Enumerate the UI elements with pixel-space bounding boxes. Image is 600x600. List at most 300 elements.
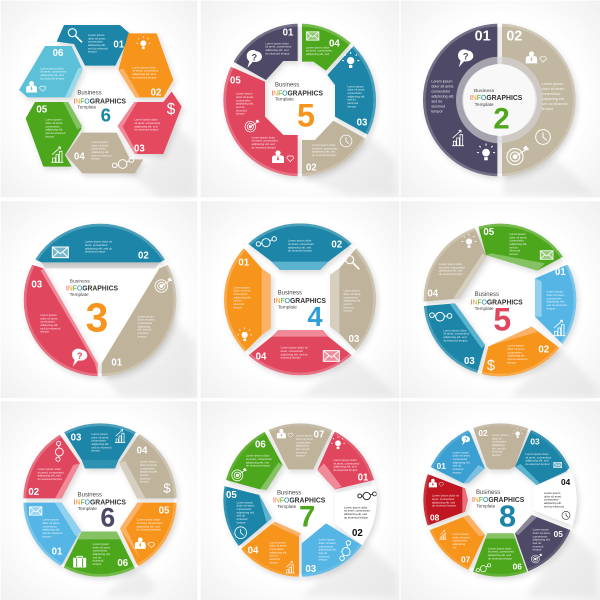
segment 02: tempor (492, 453, 501, 457)
segment 05: Lorem ipsum (237, 500, 254, 504)
center title: Template (475, 306, 494, 311)
segment 04: adipiscing elit, (269, 550, 287, 554)
panel: four sectors (191, 189, 409, 408)
segment 02: 02 (478, 428, 488, 438)
segment 01: Lorem ipsum (431, 79, 452, 83)
center title: 7 (299, 501, 315, 534)
segment 01: consectetur (233, 292, 248, 296)
center title (471, 292, 523, 338)
segment 05: sed do (533, 541, 542, 545)
segment 04: 04 (256, 351, 267, 362)
segment 02: sit amet, consectetur (288, 242, 314, 246)
segment 02: consectetur (542, 92, 561, 96)
segment 01: consectetur (547, 296, 561, 300)
segment 08 (401, 474, 468, 526)
segment 06: 06 (117, 558, 129, 569)
hexagon 06: adipiscing elit, sed (40, 73, 64, 77)
center title: INFOGRAPHICS (470, 95, 523, 102)
segment 04: 04 (248, 546, 259, 557)
segment 02: 02 (138, 250, 149, 261)
segment 03: sit amet, consectetur (443, 332, 469, 336)
segment 05: Lorem ipsum dolor (252, 135, 275, 139)
segment 03: dolor sit amet, (91, 435, 109, 439)
segment 01: adipiscing elit, sed (333, 465, 357, 469)
segment 06: Lorem ipsum dolor (246, 454, 269, 458)
segment 04: Lorem ipsum dolor (439, 262, 462, 266)
segment 06: consectetur (93, 549, 107, 553)
segment 04 (120, 434, 180, 502)
segment 05: sed do (237, 514, 246, 518)
segment 04: dolor sit amet, (269, 544, 287, 548)
segment 02: consectetur (492, 440, 507, 444)
segment 01: elit, sed do (138, 328, 152, 332)
segment 04 (533, 472, 599, 527)
segment 04: eiusmod (140, 476, 151, 480)
segment 03: sed do eiusmod (91, 445, 112, 449)
center title: 3 (86, 295, 108, 341)
hexagon 01: adipiscing elit, (88, 43, 106, 47)
segment 02: adipiscing elit, (507, 354, 525, 358)
segment 04: adipiscing elit, sed do (281, 352, 308, 356)
segment 04: consectetur (140, 466, 155, 470)
segment 04: sed do (269, 554, 278, 558)
segment 04: adipiscing elit, sed (439, 269, 463, 273)
segment 03: tempor (91, 449, 100, 453)
center title: Business (77, 91, 102, 97)
segment 01: sit amet, consectetur (265, 45, 291, 49)
segment 01: dolor sit amet, (42, 521, 60, 525)
segment 03: 03 (357, 118, 368, 129)
center title: Template (278, 305, 297, 310)
segment 01: tempor (453, 470, 462, 474)
hexagon 05: tempor (45, 134, 54, 138)
segment 03: dolor sit amet, (343, 292, 361, 296)
hexagon 06: 06 (53, 48, 64, 59)
center title: INFOGRAPHICS (66, 285, 118, 292)
center title: INFOGRAPHICS (271, 90, 323, 97)
segment 02: sed do eiusmod (507, 357, 528, 361)
hexagon 05: 05 (36, 105, 48, 116)
center title: Template (70, 292, 89, 297)
segment 01 (234, 24, 302, 84)
segment 04: adipiscing elit, (140, 470, 158, 474)
segment 03: Lorem ipsum dolor (443, 328, 467, 332)
center title: 6 (100, 503, 115, 533)
center title (470, 88, 523, 136)
segment 05: adipiscing elit, (236, 102, 254, 106)
segment 06: adipiscing elit, (93, 552, 111, 556)
segment 05: eiusmod (533, 544, 544, 548)
segment 05: tempor (236, 112, 245, 116)
center title: Business (278, 291, 302, 297)
segment 06: sit amet, consectetur (488, 550, 514, 554)
segment 03: tempor (319, 558, 328, 562)
segment 02: adipiscing elit, sed do (85, 246, 112, 250)
hexagon 04: consectetur (91, 147, 106, 151)
segment 02: 02 (28, 487, 39, 498)
hexagon 02: Lorem ipsum dolor (132, 65, 156, 69)
segment 05 (223, 66, 302, 180)
segment 04: amet, consectetur (281, 349, 303, 353)
segment 01: adipiscing elit, (453, 460, 471, 464)
segment 02: adipiscing elit, sed (344, 512, 368, 516)
hexagon 06: do eiusmod tempor (40, 76, 65, 80)
segment 06: do eiusmod tempor (246, 464, 270, 468)
center title: INFOGRAPHICS (273, 497, 326, 504)
segment 07: 07 (314, 430, 324, 441)
segment 03: Lorem ipsum (347, 84, 364, 88)
segment 05: 05 (483, 227, 495, 238)
segment 05: adipiscing elit, (533, 538, 551, 542)
hexagon 01: sed do eiusmod (88, 46, 108, 50)
hexagon 01: Lorem ipsum (88, 33, 105, 37)
segment 06: Lorem ipsum dolor (488, 546, 511, 550)
segment 01: do eiusmod tempor (333, 468, 358, 472)
segment 01: tempor (138, 334, 147, 338)
segment 03: do eiusmod tempor (443, 338, 468, 342)
segment 03: Lorem ipsum (343, 289, 360, 293)
segment 04: adipiscing elit, sed (306, 52, 330, 56)
segment 01: 01 (555, 267, 566, 278)
segment 01: consectetur (42, 524, 57, 528)
segment 02: sed do eiusmod (542, 102, 567, 106)
segment 04: Lorem ipsum dolor sit (281, 346, 308, 350)
hexagon 03: $ (167, 101, 176, 118)
hexagon 04: adipiscing elit, (91, 150, 109, 154)
hexagon 05: Lorem ipsum (45, 118, 62, 122)
segment 02 (302, 120, 367, 180)
segment 06: adipiscing elit, sed (488, 553, 512, 557)
segment 07: consectetur (453, 539, 467, 543)
segment 02: tempor (507, 360, 516, 364)
segment 03: consectetur (319, 544, 333, 548)
segment 04: sit amet, consectetur (306, 49, 332, 53)
segment 08: 08 (430, 513, 440, 523)
segment 01: adipiscing elit, (233, 295, 251, 299)
segment 07: adipiscing (296, 444, 309, 448)
inner ring (460, 60, 539, 140)
segment 07: Lorem ipsum (453, 532, 470, 536)
segment 04 (248, 330, 353, 380)
segment 02: Lorem ipsum (507, 344, 524, 348)
segment 03: adipiscing elit, sed (525, 459, 549, 463)
segment 03: adipiscing elit, (343, 299, 361, 303)
segment 01 (317, 432, 376, 493)
segment 01: consectetur (453, 457, 467, 461)
center circle (463, 64, 535, 136)
segment 04: consectetur (269, 547, 284, 551)
hexagon 04: tempor (91, 157, 100, 161)
segment 05 (515, 515, 579, 580)
segment 05: consectetur (533, 534, 547, 538)
hexagon 02 (118, 33, 173, 98)
segment 03: 03 (530, 436, 540, 446)
segment 07 (421, 515, 485, 578)
segment 02 (35, 224, 167, 268)
segment 01: dolor sit amet, (431, 84, 454, 88)
segment 01: 01 (238, 258, 250, 269)
segment 02: consectetur (507, 350, 522, 354)
segment 01: dolor sit amet, (233, 289, 251, 293)
center title: Business (476, 490, 500, 496)
segment 02: sit amet, consectetur (38, 470, 64, 474)
segment 02: Lorem ipsum dolor (312, 143, 335, 147)
segment 03 (302, 523, 364, 581)
center title: 6 (101, 104, 111, 125)
segment 04: 04 (329, 38, 340, 49)
segment 01: dolor sit amet, (138, 318, 156, 322)
segment 06: eiusmod (93, 559, 104, 563)
segment 03: tempor (343, 309, 352, 313)
hexagon 05: dolor sit amet, (45, 121, 63, 125)
segment 03: sit amet, consectetur (525, 455, 551, 459)
hexagon 04: 04 (74, 152, 85, 163)
segment 03 (330, 248, 380, 353)
segment 01: sed do (233, 299, 242, 303)
segment 03: Lorem ipsum (319, 538, 336, 542)
hexagon 05: sed do eiusmod (45, 131, 66, 135)
segment 05: consectetur (509, 239, 524, 243)
segment 02: Lorem ipsum dolor (288, 239, 311, 243)
segment 01: eiusmod (453, 467, 464, 471)
segment 02: sit amet, consectetur (344, 509, 370, 513)
hexagon 05: consectetur (45, 124, 60, 128)
center title: 2 (493, 103, 510, 136)
segment 07: eiusmod (296, 450, 307, 454)
segment 02: 02 (506, 29, 522, 45)
segment 04: dolor sit amet, (544, 494, 562, 498)
hexagon 02: 02 (151, 87, 161, 98)
center title (271, 83, 323, 134)
segment 01: consectetur (431, 89, 451, 93)
segment 04: eiusmod tempor (281, 356, 301, 360)
hexagon 01: tempor (88, 50, 97, 54)
segment 05: sit amet, consectetur (252, 139, 278, 143)
segment 03: sed do (347, 98, 356, 102)
segment 03: eiusmod (347, 101, 358, 105)
segment 02: Lorem ipsum (542, 82, 563, 86)
segment 01: sed do eiusmod (42, 531, 63, 535)
segment 07: dolor sit amet, (453, 535, 471, 539)
segment 03: adipiscing elit, (91, 442, 109, 446)
center title: 4 (307, 301, 323, 332)
segment 04: dolor sit amet, (140, 463, 158, 467)
segment 02 (23, 434, 83, 502)
segment 05: adipiscing elit, (237, 510, 255, 514)
segment 01: Lorem ipsum (138, 314, 155, 318)
segment 04: tempor (269, 560, 278, 564)
segment 06: tempor (93, 562, 102, 566)
segment 05: do eiusmod tempor (137, 528, 161, 532)
segment 01: sed do eiusmod (547, 303, 567, 307)
segment 07: elit, sed do (296, 447, 310, 451)
hexagon 04 (66, 133, 143, 173)
segment 03: adipiscing elit, (347, 94, 365, 98)
segment 05: tempor (509, 252, 518, 256)
panel: five sector octagon ring (200, 1, 406, 197)
hexagon 06 (19, 46, 83, 97)
segment 01 (535, 265, 580, 346)
segment 05: 05 (159, 505, 170, 516)
segment 05: consectetur (236, 98, 251, 102)
center title (273, 490, 326, 534)
segment 04: adipiscing elit, (544, 501, 562, 505)
segment 07: Lorem ipsum (296, 434, 313, 438)
center title: Business (70, 279, 90, 285)
hexagon 02: sit amet, consectetur (132, 69, 158, 73)
segment 03: adipiscing elit, sed (443, 335, 467, 339)
segment 02: elit, sed do (492, 446, 506, 450)
hexagon 04: dolor sit amet, (91, 143, 109, 147)
hexagon 01 (57, 25, 131, 66)
segment 06: Lorem ipsum (93, 542, 110, 546)
segment 01: tempor (431, 109, 443, 113)
segment 04: consectetur (544, 498, 559, 502)
segment 03: do eiusmod tempor (525, 462, 550, 466)
segment 05: do eiusmod tempor (252, 145, 276, 149)
segment 03: 03 (305, 564, 317, 575)
center title (66, 279, 118, 341)
hexagon 03: sit amet, consectetur (134, 121, 160, 125)
hexagon 03 (118, 92, 182, 154)
segment 03: consectetur (347, 91, 362, 95)
segment 01: adipiscing elit, (431, 94, 454, 98)
segment 01: adipiscing elit, sed (265, 48, 289, 52)
segment 06: sit amet, consectetur (246, 457, 272, 461)
segment 05: tempor (533, 548, 542, 552)
segment 02: dolor sit (492, 436, 502, 440)
segment 04: $ (163, 480, 171, 495)
center title: INFOGRAPHICS (74, 499, 126, 506)
segment 03: eiusmod (343, 305, 354, 309)
segment 02: Lorem ipsum dolor (38, 467, 61, 471)
segment 06: do eiusmod tempor (488, 556, 512, 560)
segment 08: Lorem ipsum dolor sit (432, 494, 459, 498)
segment 03: 03 (71, 432, 82, 443)
segment 05: dolor sit amet, (236, 95, 254, 99)
segment 04 (302, 24, 352, 74)
segment 01: tempor (42, 534, 51, 538)
hexagon 04: sed do eiusmod (91, 153, 112, 157)
hexagon 01: 01 (113, 39, 125, 50)
segment 01: consectetur (138, 321, 152, 325)
segment 05: consectetur (237, 507, 251, 511)
segment 05 (223, 486, 274, 548)
segment 03: consectetur (91, 439, 106, 443)
center title: Template (476, 504, 496, 509)
segment 03 (515, 424, 575, 485)
segment 06: sed do (93, 555, 102, 559)
hexagon 03: do eiusmod tempor (134, 128, 159, 132)
segment 02: adipiscing elit, sed (288, 245, 312, 249)
segment 03 (424, 303, 488, 376)
panel: eight sectors (401, 401, 600, 600)
hexagon 05 (26, 102, 82, 167)
segment 04: Lorem ipsum (140, 460, 157, 464)
hexagon 01: dolor sit amet, (88, 36, 106, 40)
segment 03: 03 (349, 334, 360, 345)
segment 01 (424, 423, 485, 483)
panel: three sectors (0, 194, 202, 398)
segment 03: adipiscing elit, (40, 323, 58, 327)
center title: Template (275, 97, 294, 102)
segment 02: $ (487, 358, 495, 374)
segment 03: tempor (347, 104, 356, 108)
segment 02: Lorem ipsum dolor (344, 505, 367, 509)
segment 03: Lorem ipsum (91, 432, 108, 436)
segment 02: adipiscing elit, sed (312, 150, 336, 154)
segment 01: 01 (52, 546, 63, 557)
hexagon 05: adipiscing elit, (45, 128, 63, 132)
segment 05: Lorem ipsum (533, 528, 550, 532)
segment 02: Lorem ipsum dolor sit (85, 240, 112, 244)
segment 08: do eiusmod tempor (432, 504, 456, 508)
segment 05: 05 (226, 490, 237, 501)
segment 01: dolor sit amet, (547, 293, 565, 297)
segment 02: amet, consectetur (85, 243, 108, 247)
segment 02 (482, 326, 562, 380)
center title: Template (78, 506, 97, 511)
panel: six hexagons (1, 1, 197, 197)
segment 05: 05 (230, 75, 241, 86)
segment 02 (335, 488, 380, 548)
segment 01: adipiscing elit, (547, 300, 565, 304)
segment 05: dolor sit amet, (509, 235, 527, 239)
center title: Template (77, 105, 97, 110)
segment 01 (23, 502, 84, 568)
hexagon 06: sit amet, consectetur (40, 70, 66, 74)
segment 01: 01 (475, 29, 491, 45)
segment 01: 01 (111, 358, 123, 369)
center title (74, 492, 126, 533)
segment 01: Lorem ipsum dolor (265, 41, 289, 45)
segment 03: eiusmod (319, 554, 330, 558)
segment 02: 02 (306, 163, 317, 174)
segment 05 (478, 224, 564, 274)
segment 01 (224, 248, 275, 354)
segment 05: Lorem ipsum (509, 232, 526, 236)
center title: INFOGRAPHICS (472, 497, 525, 504)
hexagon 01: consectetur (88, 40, 103, 44)
segment 02: do eiusmod tempor (288, 249, 312, 253)
segment 03: tempor (40, 330, 49, 334)
segment 03: sed do (343, 302, 352, 306)
segment 02: do eiusmod tempor (344, 515, 368, 519)
segment 03: 03 (464, 356, 475, 367)
segment 07: adipiscing (453, 542, 466, 546)
segment 01: eiusmod (233, 302, 244, 306)
center title: Business (277, 490, 301, 496)
segment 02: sit amet, consectetur (312, 146, 338, 150)
segment 01: adipiscing (138, 324, 151, 328)
segment 03 (64, 423, 137, 474)
segment 02: Lorem ipsum (492, 433, 509, 437)
segment 03: sed do (319, 551, 328, 555)
segment 04: Lorem ipsum dolor (306, 45, 329, 49)
segment 05: eiusmod (236, 108, 247, 112)
segment 01: eiusmod (431, 104, 445, 108)
segment 03: dolor sit amet, (319, 541, 337, 545)
shadow under blue segment (42, 262, 160, 268)
segment 08: adipiscing elit, sed (432, 500, 456, 504)
segment 05: tempor (237, 520, 246, 524)
segment 05: eiusmod (509, 249, 520, 253)
panel: six sectors (1, 394, 197, 600)
segment 05: adipiscing elit, sed (137, 524, 160, 528)
segment 03: Lorem ipsum (40, 313, 57, 317)
panel: five pentagon ring (401, 197, 600, 402)
segment 02: 02 (331, 239, 342, 250)
